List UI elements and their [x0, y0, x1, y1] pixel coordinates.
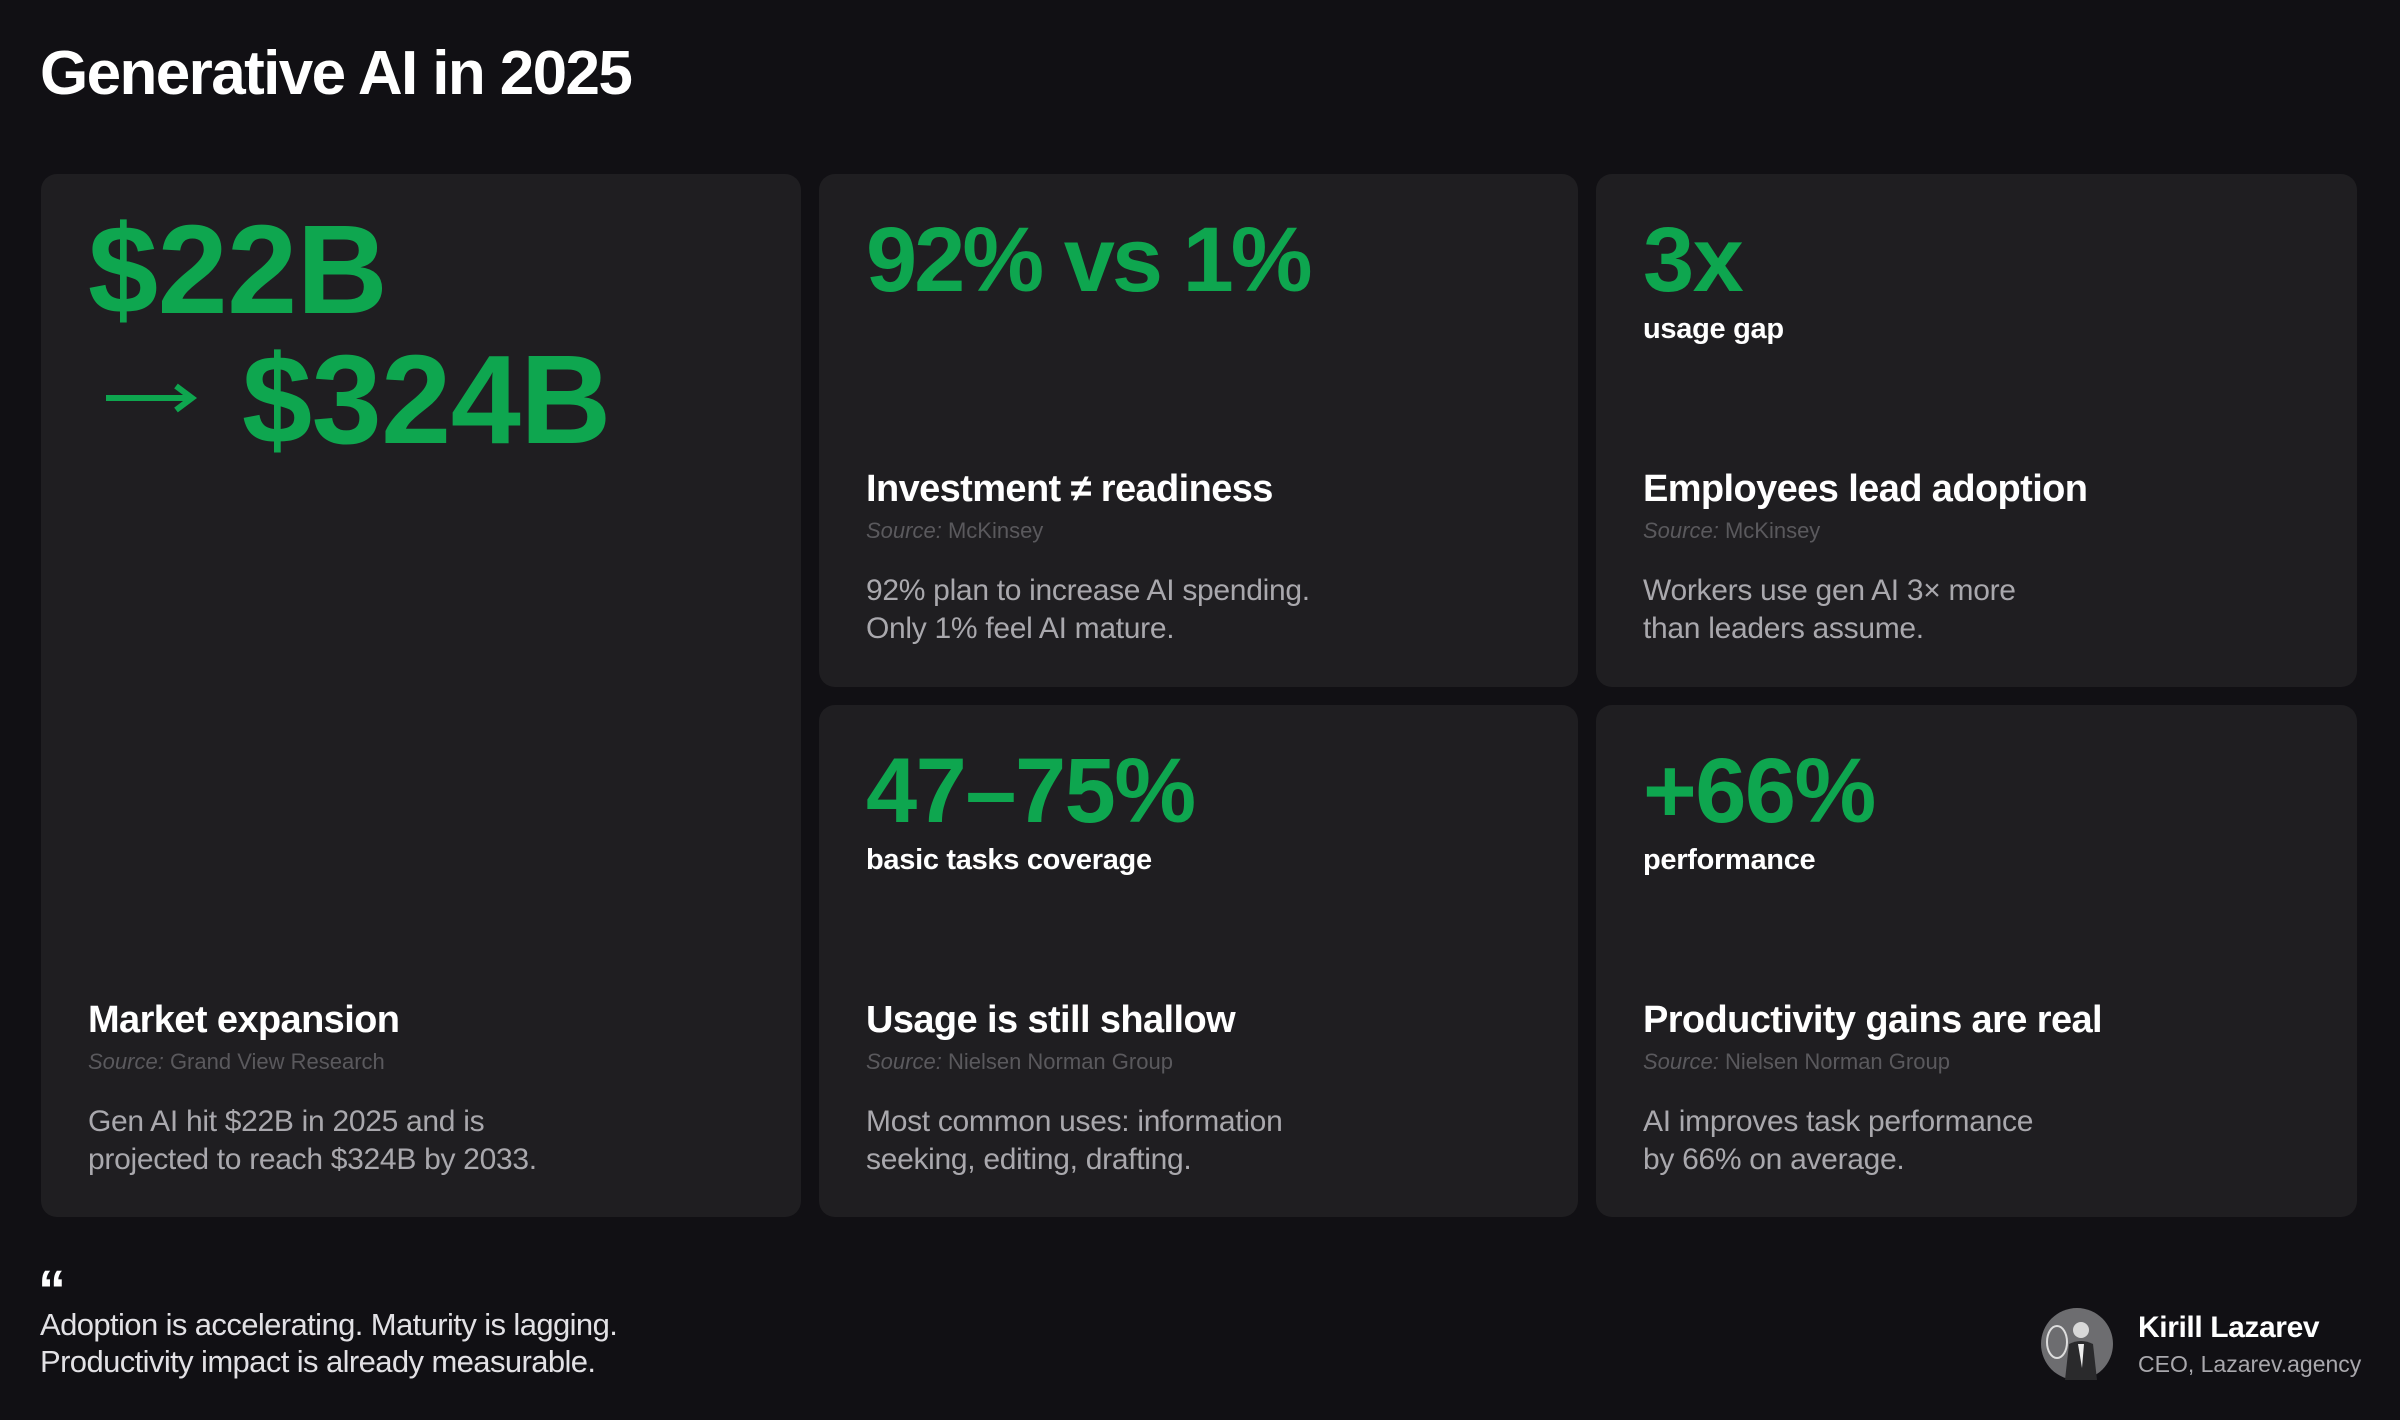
big number: 47–75% [866, 740, 1195, 842]
big number: $22B: $22B [88, 199, 387, 340]
heading: Usage is still shallow [866, 999, 1235, 1041]
panel: investment readiness [819, 174, 1578, 687]
source: Source: McKinsey [866, 518, 1043, 543]
icon: arrow [106, 384, 197, 412]
sub label: performance [1643, 844, 1815, 876]
body text [88, 1105, 537, 1176]
icon: quote mark: “ [38, 1258, 66, 1321]
body text: Only 1% feel AI mature. [866, 612, 1174, 645]
body text: Gen AI hit $22B in 2025 and is [88, 1105, 484, 1138]
big number: 92% vs 1% [866, 209, 1310, 311]
heading: Market expansion [88, 999, 399, 1041]
body text: by 66% on average. [1643, 1143, 1904, 1176]
panel: market expansion [41, 174, 801, 1217]
quote text [40, 1307, 617, 1379]
role: CEO, Lazarev.agency [2138, 1351, 2361, 1377]
body text: projected to reach $324B by 2033. [88, 1143, 537, 1176]
source: Source: McKinsey [1643, 518, 1820, 543]
source: Source: Grand View Research [88, 1049, 385, 1074]
name: Kirill Lazarev [2138, 1311, 2319, 1344]
panel: productivity gains [1596, 705, 2357, 1217]
heading: Employees lead adoption [1643, 468, 2087, 510]
body text: seeking, editing, drafting. [866, 1143, 1191, 1176]
panel: usage shallow [819, 705, 1578, 1217]
panel: employees lead adoption [1596, 174, 2357, 687]
body text: Workers use gen AI 3× more [1643, 574, 2016, 607]
author block [2041, 1308, 2362, 1380]
sub label: usage gap [1643, 313, 1784, 345]
body text: AI improves task performance [1643, 1105, 2033, 1138]
title: Generative AI in 2025 [40, 39, 631, 108]
sub label: basic tasks coverage [866, 844, 1152, 876]
heading: Investment ≠ readiness [866, 468, 1273, 510]
body text [866, 1105, 1282, 1176]
quote text: Adoption is accelerating. Maturity is lagging. [40, 1307, 617, 1342]
body text [1643, 1105, 2033, 1176]
big number: 3x [1643, 209, 1742, 311]
heading: Productivity gains are real [1643, 999, 2102, 1041]
body text: 92% plan to increase AI spending. [866, 574, 1310, 607]
quote text: Productivity impact is already measurable. [40, 1344, 595, 1379]
source: Source: Nielsen Norman Group [866, 1049, 1173, 1074]
icon: avatar [2041, 1308, 2113, 1380]
body text [866, 574, 1310, 645]
big number: +66% [1643, 740, 1875, 842]
body text: Most common uses: information [866, 1105, 1282, 1138]
body text [1643, 574, 2016, 645]
body text: than leaders assume. [1643, 612, 1924, 645]
source: Source: Nielsen Norman Group [1643, 1049, 1950, 1074]
big number: $324B: $324B [242, 329, 611, 470]
